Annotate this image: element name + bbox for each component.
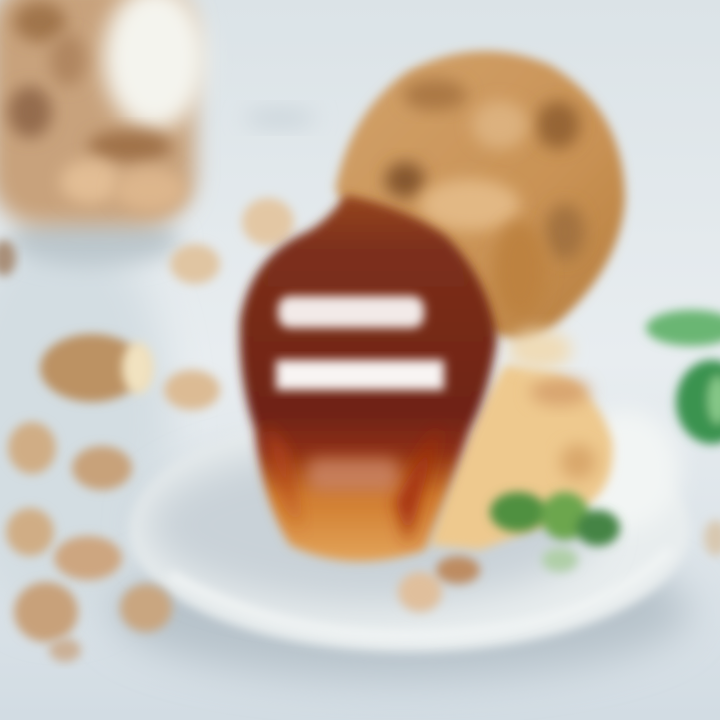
green leaves at right edge (646, 310, 720, 444)
crumbs on plate (398, 556, 480, 612)
lower cookie (430, 330, 613, 550)
jar of cookies (0, 0, 207, 266)
large cookie (335, 51, 625, 345)
faint background highlight (244, 108, 316, 128)
blurred label text (276, 296, 444, 492)
sauce-coated cookie (240, 195, 497, 561)
cool shadow at left (0, 220, 170, 620)
mint leaves on plate (490, 492, 620, 572)
scattered crumbs (0, 198, 720, 662)
plate (110, 408, 690, 680)
